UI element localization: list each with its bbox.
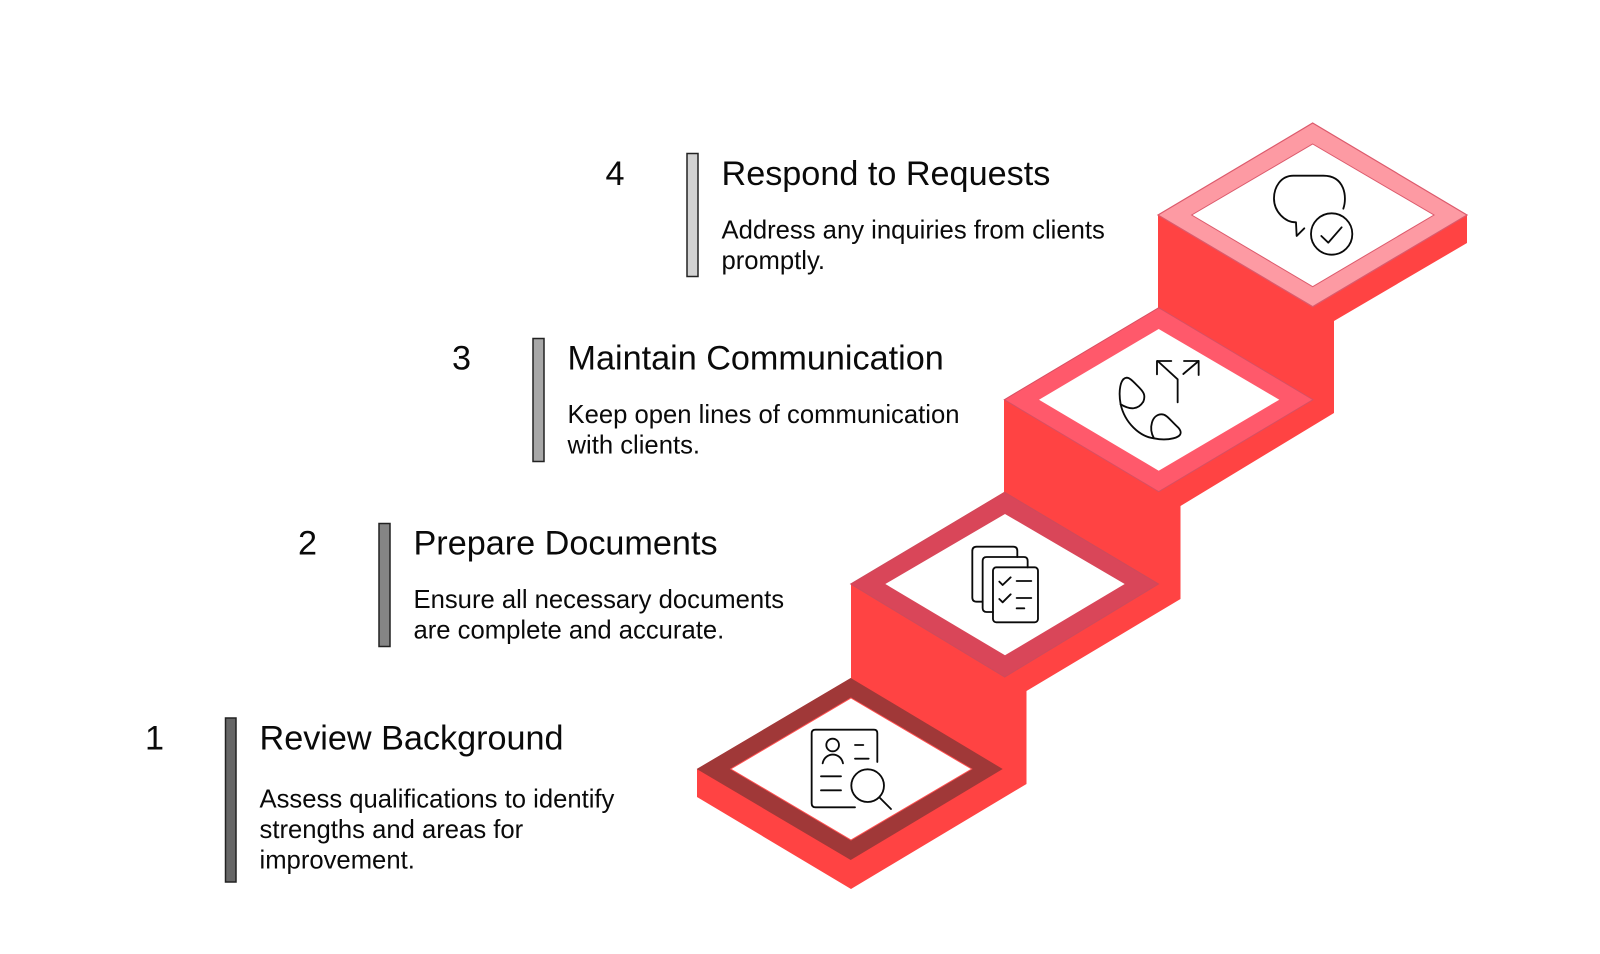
step 2 text	[298, 524, 784, 646]
step 4 text	[606, 154, 1105, 276]
step 1 text	[145, 718, 615, 882]
step 4 text: promptly.	[722, 247, 825, 275]
step 2 platform	[851, 492, 1158, 677]
step 1 platform	[697, 678, 1003, 860]
step 4 text: Respond to Requests	[722, 155, 1050, 193]
step 1 text: strengths and areas for	[260, 816, 524, 844]
step 4 text: 4	[606, 155, 625, 193]
step 1 text: Assess qualifications to identify	[260, 786, 615, 814]
icon: phone with split arrows	[1120, 361, 1199, 439]
step 2 text: are complete and accurate.	[414, 616, 724, 644]
step 4 text: Address any inquiries from clients	[722, 216, 1105, 244]
step 3 text: Keep open lines of communication	[568, 401, 959, 429]
step 2 text: Ensure all necessary documents	[414, 586, 784, 614]
step 3 text	[452, 338, 959, 462]
step 3 text: Maintain Communication	[568, 340, 944, 378]
step 1 text: Review Background	[260, 720, 564, 758]
step 2 text: 2	[298, 524, 317, 562]
icon: checklist documents	[972, 547, 1038, 622]
step 3 text: with clients.	[566, 432, 700, 460]
step 1 text: 1	[145, 720, 164, 758]
step 4 platform	[1158, 123, 1467, 307]
staircase body	[697, 123, 1467, 889]
icon: profile with magnifier	[812, 730, 891, 809]
step 1 text: improvement.	[260, 846, 415, 874]
step 2 text: Prepare Documents	[414, 524, 718, 562]
icon: speech bubble with check	[1274, 176, 1352, 255]
step 3 platform	[1004, 308, 1313, 492]
step 3 text: 3	[452, 340, 471, 378]
